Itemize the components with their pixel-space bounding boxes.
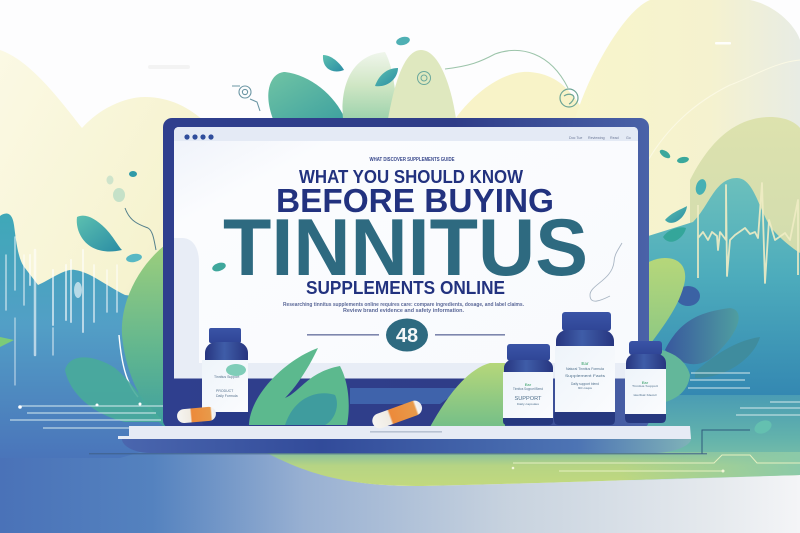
navigation links: Go xyxy=(626,136,631,140)
spiral: left xyxy=(232,86,260,111)
right foliage xyxy=(605,258,800,415)
right waveform hills xyxy=(645,148,800,395)
supplement bottle: tall xyxy=(554,312,615,425)
supplement bottle: tall: 60 caps xyxy=(578,386,593,390)
title line 1: WHAT YOU SHOULD KNOW xyxy=(299,167,523,187)
supplement bottle: centre-left: SUPPORT xyxy=(514,396,542,402)
leaf: teal left xyxy=(323,55,344,71)
circuit lines right xyxy=(688,373,800,415)
supplement bottle: left xyxy=(202,328,249,425)
floor xyxy=(0,418,800,533)
title line 2: BEFORE BUYING xyxy=(276,182,554,219)
capsule: centre xyxy=(370,399,424,430)
spiral: right xyxy=(560,89,578,107)
mid band behind laptop xyxy=(170,395,800,480)
supplement bottle: right xyxy=(625,341,666,423)
navigation links: Reviewing xyxy=(588,136,605,140)
leaf: mint xyxy=(268,72,345,119)
supplement bottle: right: Tinnitus Support xyxy=(632,384,658,388)
screen lower band xyxy=(174,363,638,378)
supplement bottle: left: Daily Formula xyxy=(216,394,238,398)
title keyword: TINNITUS xyxy=(223,203,588,293)
laptop frame xyxy=(163,118,649,429)
laptop base xyxy=(89,426,707,454)
body copy xyxy=(283,302,525,314)
circuit lines left xyxy=(10,406,163,428)
screen side panel xyxy=(174,238,199,363)
supplement bottle: tall: Ear xyxy=(581,361,589,366)
divider right xyxy=(435,334,505,336)
screen top bar xyxy=(174,127,638,141)
supplement bottle: centre-left: Daily capsules xyxy=(517,402,540,406)
navigation links: Doc Tue xyxy=(569,136,582,140)
supplement bottle: centre-left: Ear xyxy=(525,382,532,387)
body copy: Researching tinnitus supplements online requires care: compare ingredients, dosage, and label claims. xyxy=(283,302,525,308)
floating leaves left xyxy=(129,171,137,177)
navigation links xyxy=(569,136,631,140)
shadow line xyxy=(89,453,707,454)
base deck xyxy=(118,426,691,439)
capsule: left xyxy=(176,406,217,424)
low leaf left xyxy=(65,357,165,422)
large lime leaf right xyxy=(605,258,685,400)
title line 4: SUPPLEMENTS ONLINE xyxy=(306,278,505,298)
supplement bottle: right: Ear xyxy=(642,380,649,385)
large lime leaf left xyxy=(122,245,165,428)
trackpad notch xyxy=(370,431,442,433)
leaf: teal small top xyxy=(395,35,411,47)
teal leaf xyxy=(695,337,760,378)
circuit lines floor xyxy=(513,455,800,471)
lower green leaf xyxy=(640,349,690,406)
navy leaf xyxy=(665,308,739,364)
laptop xyxy=(163,118,649,429)
navy bud xyxy=(676,286,700,306)
foreground leaves xyxy=(249,348,505,427)
blue shelf in display xyxy=(350,388,462,404)
eyebrow: WHAT DISCOVER SUPPLEMENTS GUIDE xyxy=(370,157,455,163)
supplement bottle: tall: Daily support blend xyxy=(571,382,599,386)
divider left xyxy=(307,334,379,336)
spiral: top centre xyxy=(418,50,568,88)
small leaf on screen xyxy=(211,261,227,273)
body copy: Review brand evidence and safety information. xyxy=(343,308,465,314)
laptop screen xyxy=(174,127,638,378)
leaf: pale fade xyxy=(343,52,400,119)
number badge xyxy=(386,318,428,352)
floating leaves right xyxy=(694,178,708,196)
leaf: pale sage xyxy=(388,50,456,119)
left waveform hills xyxy=(0,171,170,460)
navigation links: Read xyxy=(610,136,619,140)
number badge: 48 xyxy=(396,325,418,347)
supplement bottle: tall: Supplement Facts xyxy=(565,373,605,378)
supplement bottle: left: Tinnitus Support xyxy=(214,375,239,379)
window dots xyxy=(184,134,214,140)
supplement bottle: centre-left xyxy=(503,344,553,425)
base underside xyxy=(122,439,691,453)
top foliage xyxy=(232,35,578,119)
supplement bottle: centre-left: Tinnitus Support Blend xyxy=(513,387,543,391)
thin vine xyxy=(590,243,622,301)
leaf: teal centre xyxy=(375,68,398,86)
supplement bottle: left: PRODUCT xyxy=(216,389,234,393)
connector xyxy=(702,430,750,454)
supplement bottle: right: Herbal blend xyxy=(634,393,657,397)
supplement bottle: tall: Natural Tinnitus Formula xyxy=(566,367,604,371)
